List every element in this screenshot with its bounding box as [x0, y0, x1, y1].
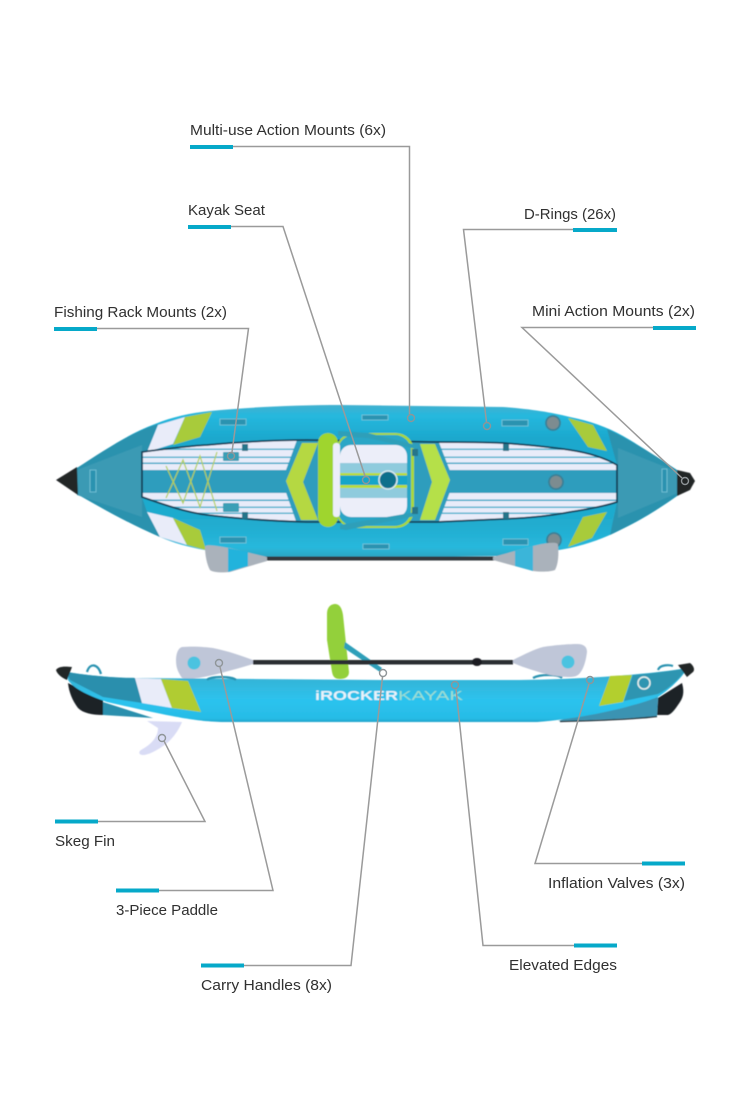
- cockpit edge: [142, 440, 617, 522]
- white and lime side patches: [135, 678, 172, 708]
- bungee cords: [166, 452, 217, 511]
- shaft: [253, 660, 513, 664]
- seat back: [327, 604, 382, 679]
- callout: d-rings: [464, 207, 617, 430]
- paddle blade left: [176, 647, 253, 679]
- stern lower panel: [558, 697, 658, 721]
- callout: mini action mounts: Mini Action Mounts (2x): [532, 304, 695, 320]
- callout: 3-piece paddle: [116, 660, 273, 919]
- callout: multi-use action mounts: [190, 123, 414, 422]
- nose tips: [56, 467, 78, 495]
- callout: mini action mounts: [522, 304, 696, 484]
- seat: [318, 431, 416, 530]
- fishing rack mounts: [223, 452, 239, 461]
- callout: d-rings: D-Rings (26x): [524, 207, 616, 223]
- dark bow shoulders: [77, 424, 160, 537]
- deck handles: [242, 444, 509, 519]
- callout: kayak seat: Kayak Seat: [188, 203, 265, 219]
- side logo: [638, 677, 650, 689]
- callout: fishing rack mounts: [54, 305, 248, 460]
- side nose tips: [56, 667, 72, 680]
- hull side: [67, 668, 687, 722]
- bow dark panel: [67, 672, 142, 703]
- callout: carry handles: Carry Handles (8x): [201, 978, 332, 994]
- bow lower panel: [103, 702, 153, 718]
- callout: skeg fin: [55, 734, 205, 850]
- brand text: iROCKER: [315, 688, 399, 703]
- side carry handles: [87, 665, 673, 680]
- hull: [77, 405, 677, 558]
- deck: [140, 438, 620, 524]
- white and lime patches: [147, 417, 185, 452]
- callout: skeg fin: Skeg Fin: [55, 834, 115, 850]
- callout: 3-piece paddle: 3-Piece Paddle: [116, 903, 218, 919]
- callout: inflation valves: [535, 676, 685, 892]
- callout: fishing rack mounts: Fishing Rack Mounts (2x): [54, 305, 227, 321]
- tube handles: [90, 415, 667, 549]
- kayak side view: KAYAK: [398, 688, 463, 703]
- black under-bow pieces: [68, 683, 103, 715]
- kayak side view: [56, 604, 694, 755]
- callout: elevated edges: Elevated Edges: [509, 958, 617, 974]
- callout: inflation valves: Inflation Valves (3x): [548, 876, 685, 892]
- callout: kayak seat: [188, 203, 370, 484]
- skeg fin: [139, 721, 182, 755]
- kayak top view: [56, 405, 695, 572]
- bow and stern panels: [77, 445, 142, 517]
- blade logos: [188, 656, 200, 670]
- inflation valves: [546, 416, 563, 547]
- seat logo: [379, 471, 397, 489]
- paddle blade right: [513, 644, 587, 677]
- callout: elevated edges: [452, 682, 617, 974]
- callout: multi-use action mounts: Multi-use Action Mounts (6x): [190, 123, 386, 139]
- paddle: [205, 543, 558, 572]
- callout: carry handles: [201, 670, 386, 994]
